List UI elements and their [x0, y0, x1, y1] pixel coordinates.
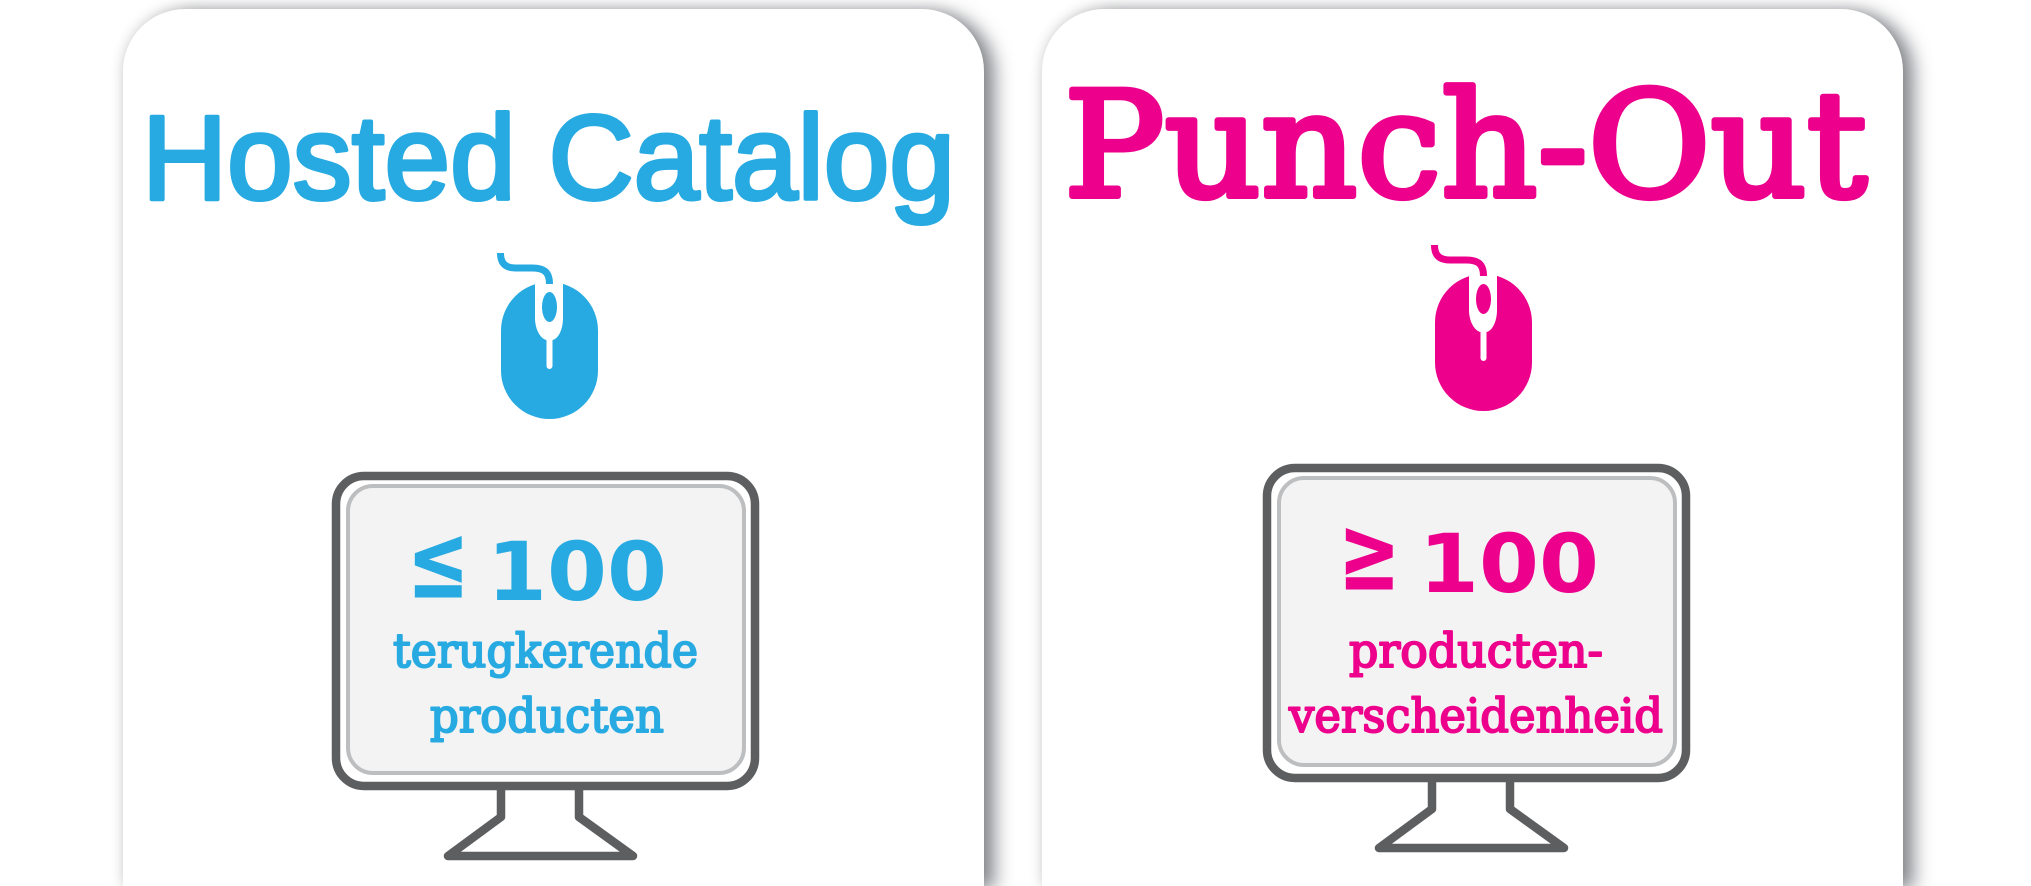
label: verscheidenheid: verscheidenheid: [1288, 689, 1663, 744]
monitor: Punch-Out: [1267, 468, 1686, 848]
number: 100: 100: [487, 526, 667, 620]
monitor stand: [448, 790, 633, 856]
monitor: Hosted Catalog: [336, 476, 755, 856]
symbol: less than or equal: ≤: [407, 499, 470, 623]
label: terugkerende: terugkerende: [393, 624, 698, 679]
label: producten: producten: [430, 689, 664, 744]
icon: pink computer mouse: [1434, 245, 1532, 411]
panel: Punch-Out card: [1042, 9, 1903, 886]
number: 100: 100: [1419, 518, 1599, 612]
heading: Punch-Out: Punch-Out: [1064, 61, 1867, 231]
panel: Hosted Catalog card: [123, 9, 984, 886]
symbol: greater than or equal: ≥: [1338, 491, 1401, 615]
monitor frame: [1267, 468, 1686, 778]
monitor screen: [348, 486, 744, 773]
heading: Hosted Catalog: Hosted Catalog: [142, 91, 955, 225]
monitor screen: [1279, 478, 1675, 765]
icon: blue computer mouse: [500, 253, 598, 419]
monitor frame: [336, 476, 755, 786]
label: producten-: producten-: [1349, 624, 1603, 679]
monitor stand: [1379, 782, 1564, 848]
